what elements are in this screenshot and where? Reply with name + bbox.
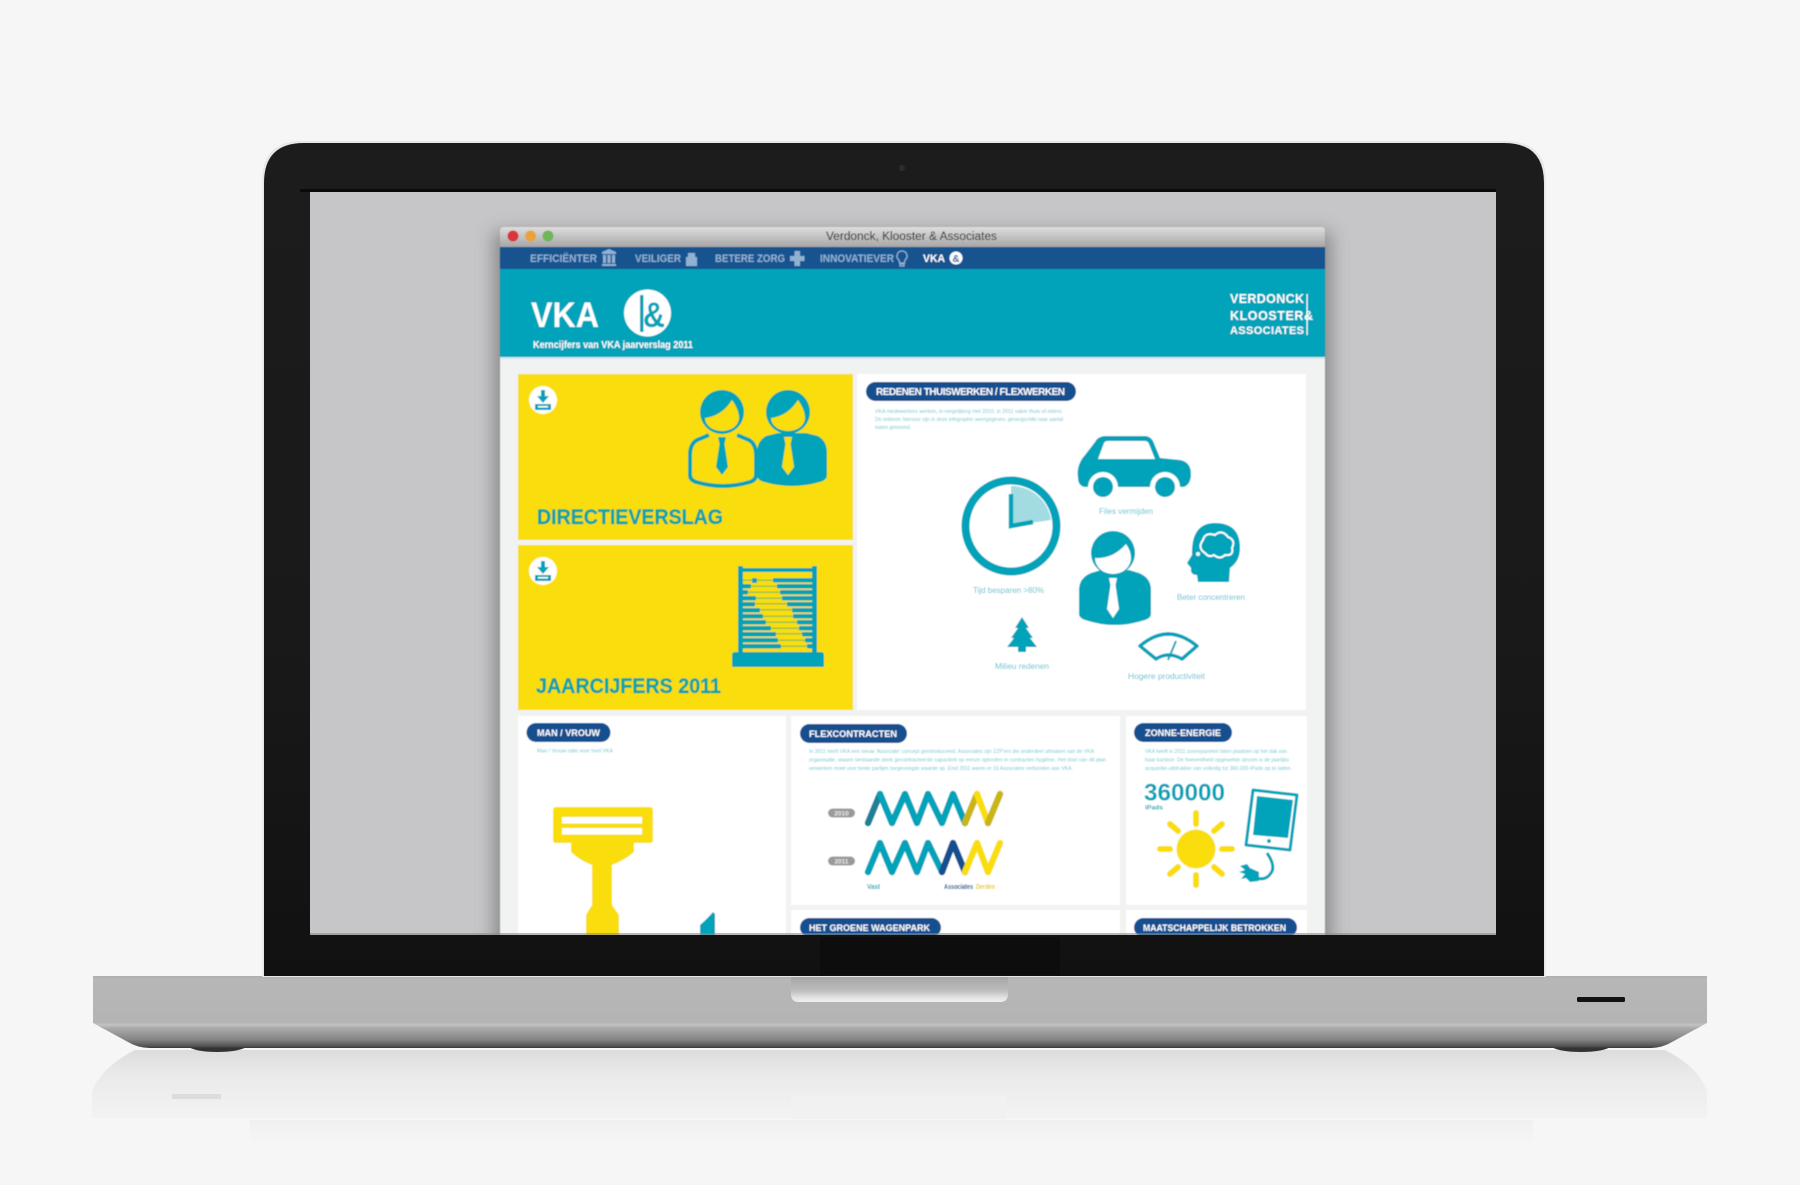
panel: flexcontracten [791,716,1120,905]
intro text [875,409,1063,431]
heading pill [1134,918,1297,937]
camera [899,165,905,171]
laptop base [93,976,1707,1052]
chart legend [867,884,995,891]
company logo [1230,292,1313,337]
icon: download [529,557,557,585]
slot [1577,997,1625,1002]
intro text: Man / Vrouw ratio voor heel VKA [537,748,614,754]
subtitle: Kerncijfers van VKA jaarverslag 2011 [533,339,693,351]
browser window on screen [310,227,1496,970]
icon: sun [1160,813,1232,885]
header band [500,269,1325,357]
foot left [187,1046,248,1052]
icon: download [529,386,557,414]
icon: employee [1079,531,1151,625]
heading pill: MAATSCHAPPELIJK BETROKKEN [1143,923,1286,934]
label: milieu: Milieu redenen [995,662,1049,671]
label: tijd: Tijd besparen >80% [973,586,1044,595]
navigation bar: VKA [923,253,945,265]
heading pill [800,724,907,743]
icon: clock [966,480,1056,572]
screen [310,192,1496,935]
heading pill [800,918,941,937]
icon: gauge [1140,632,1197,660]
navigation bar: EFFICIËNTER [530,252,597,265]
icon: tablet [1246,790,1297,850]
heading pill: REDENEN THUISWERKEN / FLEXWERKEN [876,387,1065,398]
panel: zonne-energie [1126,716,1307,905]
foot right [1550,1046,1612,1052]
icon: two managers [690,390,827,486]
panel: het groene wagenpark [791,910,1120,970]
icon: ampersand circle [950,252,962,264]
panel: jaarcijfers [518,545,853,710]
icon: plus [790,251,804,266]
heading pill: FLEXCONTRACTEN [809,729,897,740]
panel: redenen thuiswerken [857,374,1306,710]
laptop lid [262,141,1546,977]
chart legend: Associates [944,884,973,891]
chart legend: Vast [867,884,881,891]
heading pill [866,382,1076,401]
intro text: organisatie, waarin bestaande sterk gecontracteerde capaciteit op eenze optreden in contracten hygiëne. Het doel van dit plan [809,758,1106,764]
icon: bank [602,249,616,266]
title bar: Verdonck, Klooster & Associates [826,231,997,243]
title bar [500,227,1325,247]
heading pill: ZONNE-ENERGIE [1145,728,1221,739]
navigation bar: VEILIGER [635,253,681,265]
intro text: In 2011 heeft VKA een nieuw 'Associate' concept geïntroduceerd. Associates zijn ZZP'ers die onderdeel uitmaken van de VKA [809,749,1095,755]
company logo: ASSOCIATES [1230,325,1304,337]
panel: directieverslag [518,374,853,540]
navigation bar: BETERE ZORG [715,253,785,265]
laptop reflection [92,1050,1707,1144]
icon: plug [1239,853,1273,882]
big number: 360000 [1144,780,1225,806]
icon: bulb [897,251,907,266]
icon: car [1078,436,1191,497]
navigation bar: INNOVATIEVER [820,253,894,265]
heading pill: MAN / VROUW [537,728,600,739]
year tag 2010: 2010 [834,810,849,818]
icon: lock [686,253,697,266]
navigation bar: & [952,254,960,265]
logo circle: & [643,296,665,335]
icon: abacus [732,566,824,667]
VKA wordmark: VKA [531,296,599,335]
company logo: KLOOSTER& [1230,309,1313,323]
chart legend: Derden [976,884,995,891]
heading pill [526,723,610,742]
zigzag chart 2010 [868,794,1000,823]
unit: iPads [1145,806,1164,812]
heading pill [1134,723,1232,742]
intro text [809,749,1106,772]
year tag 2011: 2011 [834,858,849,866]
company logo: VERDONCK [1230,292,1304,306]
intro text: VKA heeft in 2011 zonnepanelen laten plaatsen op het dak van [1145,749,1287,755]
intro text: haar kantoor. De hoeveelheid opgewekte stroom is de jaarlijks [1145,758,1290,764]
label: files: Files vermijden [1099,507,1153,516]
zigzag chart 2011 [868,843,1000,872]
intro text: VKA medewerkers werken, in vergelijking met 2010, in 2011 vaker thuis of elders. [875,409,1063,415]
heading: DIRECTIEVERSLAG [537,506,723,529]
panel: maatschappelijk betrokken [1126,910,1307,970]
icon: brain head [1187,523,1240,582]
hinge notch [791,976,1008,1002]
intro text: De redenen hiervoor zijn in deze infographic weergegeven, gerangschikt naar aantal [875,417,1063,423]
heading: JAARCIJFERS 2011 [536,675,721,698]
intro text: acquisitie-uitdrukker van volledig tot 360.000 iPads op te laden. [1145,766,1292,772]
year tag 2011 [828,856,855,866]
panel: man / vrouw [518,716,786,935]
icon: lipstick [699,912,716,935]
year tag 2010 [828,808,855,818]
icon: razor [552,806,654,935]
label: concentreren: Beter concentreren [1177,593,1245,602]
intro text [1145,749,1292,772]
intro text: verwerken moet voor beide partijen toegevoegde waarde op. Eind 2011 waren er 16 Associates verbonden aan VKA. [809,766,1073,772]
heading pill: HET GROENE WAGENPARK [809,923,930,934]
label: productiviteit: Hogere productiviteit [1128,672,1206,681]
icon: tree [1007,617,1037,652]
navigation bar [500,247,1325,269]
intro text: malen genoemd. [875,425,911,431]
logo circle [624,290,671,336]
